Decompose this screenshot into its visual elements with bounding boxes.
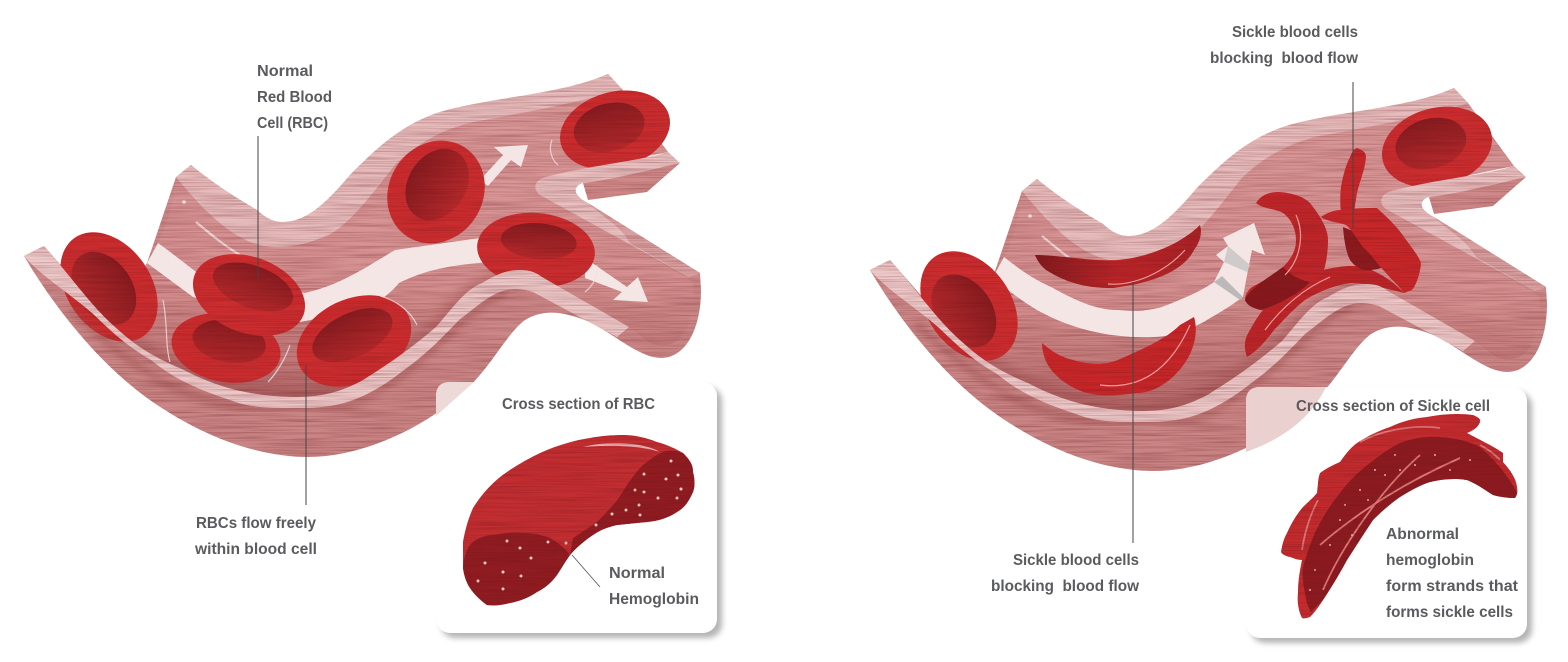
leader line: normal hemoglobin <box>572 555 600 587</box>
sickle: upper left <box>1035 225 1201 288</box>
label: abnormal hemoglobin: form strands that <box>1386 578 1519 595</box>
label: abnormal hemoglobin: hemoglobin <box>1386 552 1474 569</box>
label: sickle cells blocking, bottom: Sickle blood cells <box>1013 552 1139 569</box>
vessel front rim: sickle <box>870 166 1546 426</box>
sickle: curved centre <box>1245 192 1328 310</box>
scene: normal blood vessel <box>24 74 701 457</box>
label: normal red blood cell: Red Blood <box>257 89 332 106</box>
label: normal hemoglobin: Hemoglobin <box>609 591 699 608</box>
motion highlights around cells <box>163 140 597 382</box>
label: normal hemoglobin: Normal <box>609 565 665 582</box>
cell: upper centre <box>368 122 504 262</box>
sickle: dark overlap <box>1343 227 1390 270</box>
arrow: blocked blood flow <box>993 223 1265 337</box>
leader line: sickle top <box>1352 82 1354 228</box>
panel: cross section of RBC <box>436 382 722 638</box>
illustration: sickle cell cross section <box>1281 414 1517 618</box>
vessel front rim: normal <box>24 152 700 412</box>
label: normal red blood cell: Cell (RBC) <box>257 115 328 132</box>
heading: cross section of RBC: Cross section of RBC <box>502 396 655 413</box>
leader line: RBCs flow freely <box>305 365 307 505</box>
cell: normal far left <box>900 233 1038 379</box>
vessel wall: normal <box>24 74 701 457</box>
sickle highlights <box>1100 215 1330 386</box>
label: abnormal hemoglobin: forms sickle cells <box>1386 604 1513 621</box>
illustration: RBC cross section <box>463 435 694 605</box>
label: RBCs flow freely: RBCs flow freely <box>196 515 316 532</box>
sickle: curved centre shade <box>1245 267 1310 310</box>
cells: normal red blood cells <box>40 79 679 404</box>
label: abnormal hemoglobin: Abnormal <box>1386 526 1459 543</box>
sickle: lower left <box>1042 317 1196 395</box>
cell: top right <box>551 79 679 181</box>
vessel wall: sickle <box>870 88 1547 471</box>
label: sickle cells blocking, bottom: blocking blood flow <box>991 578 1140 595</box>
sickle: right lower <box>1321 208 1421 293</box>
leader line: sickle bottom <box>1132 282 1134 543</box>
leader line: normal RBC <box>257 136 259 280</box>
cell: right centre <box>474 208 598 292</box>
cells: sickle blood cells <box>900 95 1501 395</box>
cell: far left <box>40 214 178 360</box>
label: sickle cells blocking, top: blocking blood flow <box>1210 50 1359 67</box>
label: sickle cells blocking, top: Sickle blood cells <box>1232 24 1358 41</box>
heading: cross section of sickle cell: Cross section of Sickle cell <box>1296 398 1490 415</box>
sickle: vertical <box>1340 148 1366 212</box>
cell: behind lower <box>166 305 286 391</box>
cell: lower centre <box>282 278 426 404</box>
arrows: blood flow through vessel <box>147 145 648 323</box>
cell: normal top right <box>1373 95 1501 199</box>
scene: sickle blood vessel <box>870 88 1547 471</box>
panel: cross section of sickle cell <box>1246 387 1532 643</box>
cell: normal RBC pointed by label <box>182 239 316 351</box>
label: RBCs flow freely: within blood cell <box>194 541 317 558</box>
sickle: lower big <box>1245 266 1404 357</box>
label: normal red blood cell: Normal <box>257 63 313 80</box>
